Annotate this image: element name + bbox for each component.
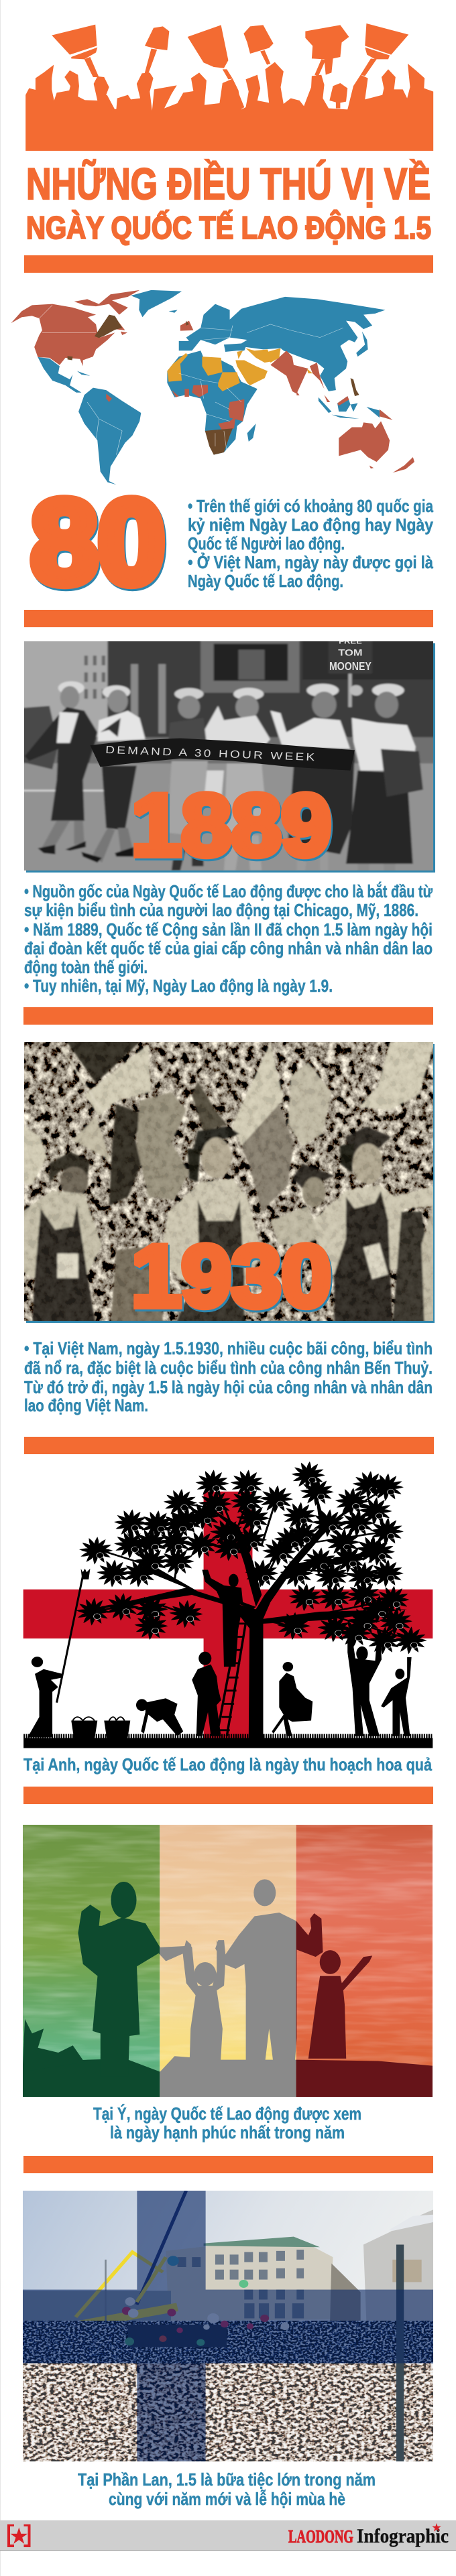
year 1930: 1930	[131, 1227, 331, 1325]
person with picking pole	[27, 1569, 90, 1737]
Finnish flag cross	[23, 2191, 433, 2461]
silhouette: white part	[160, 1879, 296, 2097]
cranes	[47, 2191, 186, 2331]
text block: 80 countries: Ngày Quốc tế Lao động.	[188, 571, 343, 591]
footer bar	[0, 2520, 456, 2551]
worker center	[160, 1126, 259, 1327]
photo: Italy family at sunset with tricolour	[23, 1825, 433, 2097]
divider bar 4	[24, 1437, 434, 1454]
paint brush 5	[305, 25, 349, 76]
sky	[23, 2191, 433, 2366]
small brush 7	[329, 83, 347, 109]
number shadow: 80	[32, 477, 166, 610]
sign: free Tom Mooney: TOM	[338, 648, 363, 658]
woman	[192, 1652, 221, 1736]
illustration: England fruit harvest with St George cross	[23, 1462, 433, 1748]
person with basket	[272, 1662, 312, 1736]
divider bar 6	[23, 2156, 433, 2173]
worker left	[17, 1152, 102, 1327]
caption: Finland: Tại Phần Lan, 1.5 là bữa tiệc lớn trong năm	[78, 2469, 376, 2490]
divider bar 3	[23, 1007, 433, 1025]
balloons	[122, 2256, 289, 2346]
figure 3	[167, 688, 208, 871]
figure 2	[81, 686, 146, 862]
orange countries	[167, 348, 312, 391]
caption: Finland: cùng với năm mới và lễ hội mùa hè	[109, 2489, 345, 2509]
brush 4	[243, 25, 274, 65]
broom 3	[188, 25, 244, 109]
man on ladder	[202, 1569, 256, 1667]
caption: Finland	[78, 2469, 376, 2509]
sign: free Tom Mooney: MOONEY	[329, 660, 372, 673]
text block: Vietnam 1930	[24, 1338, 433, 1415]
year shadow 1930: 1930	[133, 1229, 333, 1327]
clouds	[23, 1825, 433, 2097]
blue countries	[38, 290, 386, 485]
caption: Italy: là ngày hạnh phúc nhất trong năm	[110, 2122, 345, 2142]
crowd upper	[23, 2321, 433, 2364]
year 1889: 1889	[131, 776, 331, 874]
stat: 80	[31, 475, 166, 610]
text block: origin 1889	[24, 881, 433, 996]
red stripe	[296, 1825, 433, 2097]
caption: Italy	[93, 2104, 361, 2142]
tree	[76, 1462, 427, 1741]
baskets	[71, 1717, 130, 1740]
crowd silhouette	[25, 62, 433, 151]
divider bar 1	[24, 255, 433, 273]
sign: free Tom Mooney	[329, 637, 372, 673]
brown regions	[68, 315, 359, 455]
title	[26, 159, 431, 245]
worker far right	[392, 1212, 439, 1327]
number 80: 80	[31, 475, 165, 608]
waterfront	[23, 2291, 171, 2323]
flag cross	[23, 1492, 433, 1741]
figure 5	[270, 684, 363, 871]
sign: free Tom Mooney: FREE	[339, 637, 362, 645]
wordmark: Infographic: Infographic	[357, 2525, 449, 2547]
logo: bracket star	[7, 2524, 31, 2547]
child reaching	[381, 1657, 412, 1736]
figure 1	[25, 682, 97, 854]
text block: 80 countries	[188, 496, 433, 591]
green stripe	[23, 1825, 160, 2097]
vehicles	[23, 2328, 102, 2349]
man reaching	[347, 1636, 382, 1736]
worker right	[312, 1126, 439, 1327]
text block: origin 1889: động toàn thế giới.	[24, 957, 148, 977]
divider bar 2	[24, 610, 433, 627]
photo: women marching with banner	[24, 637, 433, 871]
person bending	[136, 1698, 183, 1736]
grass ground	[23, 1736, 433, 1748]
photo: Vietnamese workers with flags	[24, 1042, 433, 1321]
text block: 80 countries: Quốc tế Người lao động.	[188, 533, 345, 554]
world map	[11, 290, 414, 485]
red countries	[11, 290, 414, 472]
silhouette: red part	[296, 1913, 433, 2097]
wordmark: Lao Dong: LAODONG	[288, 2526, 353, 2547]
worker center-right	[270, 1164, 335, 1244]
text block: origin 1889: • Tuy nhiên, tại Mỹ, Ngày Lao động là ngày 1.9.	[24, 976, 333, 996]
crowd lower with white caps	[23, 2364, 433, 2461]
banner: demand a 30 hour week: DEMAND A 30 HOUR WEEK	[105, 743, 315, 763]
caption: Italy: Tại Ý, ngày Quốc tế Lao động được xem	[93, 2104, 361, 2124]
photo panel: 1889 march	[17, 637, 439, 876]
figure 4	[201, 688, 270, 871]
ladder	[217, 1614, 247, 1736]
figure 6	[346, 684, 423, 876]
white stripe	[160, 1825, 296, 2097]
country borders	[40, 305, 343, 455]
divider bar 5	[23, 1787, 433, 1804]
brush 2	[145, 26, 169, 74]
star on wordmark	[432, 2523, 441, 2532]
banner: raised arms with brooms silhouette	[25, 23, 433, 151]
text block: Vietnam 1930: lao động Việt Nam.	[24, 1395, 148, 1415]
year shadow 1889: 1889	[133, 778, 333, 876]
silhouette: green part	[23, 1882, 160, 2097]
photo panel: 1930 Vietnam	[17, 1038, 439, 1327]
banner: demand a 30 hour week	[90, 738, 355, 771]
lamp post	[396, 2245, 404, 2461]
photo: Finland crowd with flag cross	[23, 2191, 433, 2461]
flags	[17, 1038, 436, 1206]
building	[166, 2209, 433, 2321]
broom 6	[347, 23, 408, 111]
broom 1	[52, 25, 115, 111]
